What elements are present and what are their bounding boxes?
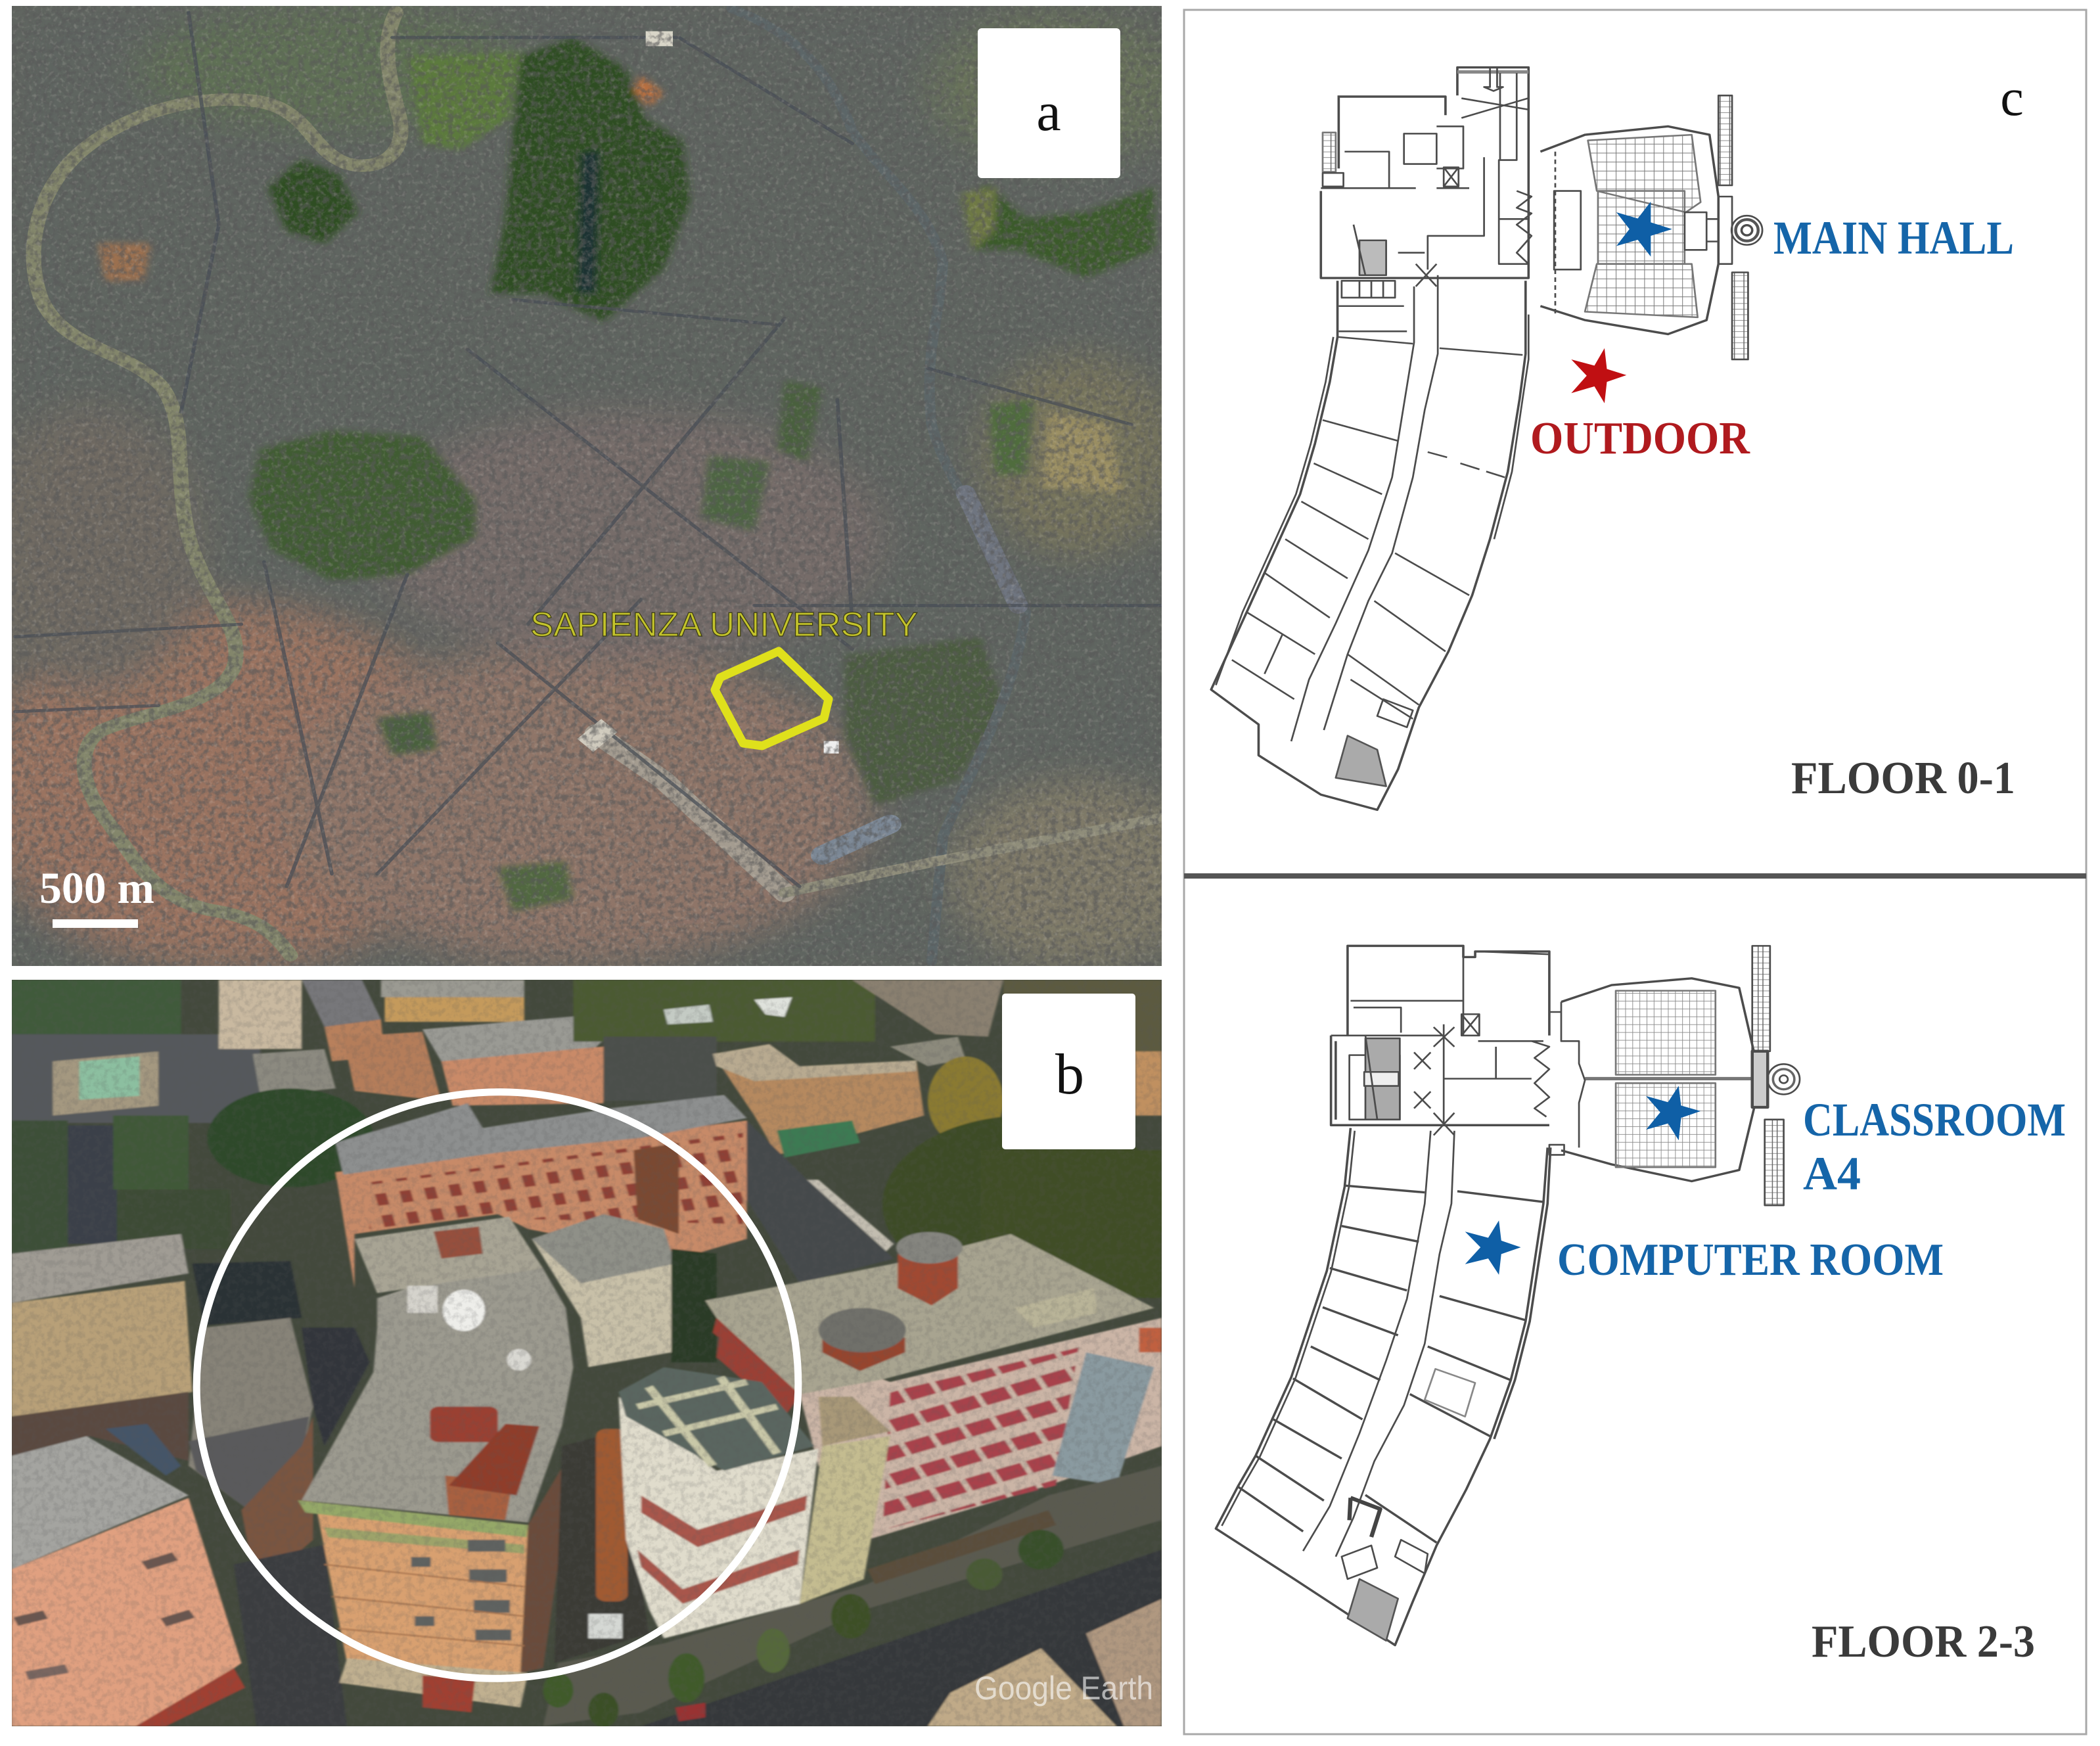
star: outdoor [1571, 348, 1626, 403]
main hall outline and seating [1540, 95, 1762, 359]
star: computer room [1465, 1220, 1521, 1275]
label: floor 2-3: FLOOR 2-3 [1812, 1617, 2035, 1667]
label: outdoor: OUTDOOR [1530, 413, 1750, 464]
surroundings top left [11, 980, 607, 1254]
top block: entrance and stairs [1331, 946, 1564, 1155]
wing: outer walls, corridor and rooms [1211, 275, 1528, 810]
dark gap and orange cylindrical stairs [555, 1429, 649, 1663]
watermark: Google Earth: Google Earth [974, 1670, 1153, 1707]
central curved roof building [298, 1217, 573, 1712]
label: classroom A4: CLASSROOM [1803, 1093, 2066, 1146]
yellow outline: Sapienza University campus [715, 651, 829, 746]
panel a: satellite map of Rome [0, 5, 1207, 968]
floor plan: floor 0-1 [1211, 68, 1762, 810]
left small building and road [189, 1261, 370, 1726]
front white building [618, 1367, 890, 1638]
label box: b: b [1055, 1043, 1084, 1107]
map label: Sapienza University: SAPIENZA UNIVERSITY [530, 606, 918, 644]
left-side buildings [11, 1234, 245, 1726]
panel c: floor plans frame [1184, 10, 2086, 1734]
surroundings top right [573, 980, 1169, 1298]
floor plan: floor 2-3 [1216, 946, 1800, 1645]
label box: a [978, 28, 1120, 178]
star: main hall [1616, 202, 1672, 257]
label box: b [1002, 994, 1135, 1149]
panel b: aerial view of the buildings [11, 980, 1169, 1727]
top block: entrance and stairs [1321, 68, 1532, 298]
label: computer room: COMPUTER ROOM [1557, 1235, 1944, 1285]
label: classroom A4: A4 [1803, 1147, 1861, 1200]
label: floor 0-1: FLOOR 0-1 [1791, 753, 2015, 804]
label: main hall: MAIN HALL [1773, 212, 2014, 264]
label box: a: a [1036, 81, 1061, 143]
pale striped building [532, 1214, 717, 1367]
star: classroom A4 [1646, 1086, 1701, 1140]
right red striped building [705, 1232, 1162, 1540]
scale bar: 500 m: 500 m [39, 863, 154, 913]
white ellipse marking the studied building [158, 1053, 836, 1717]
central orange building [336, 1095, 747, 1288]
classroom A4 outline and seating [1549, 946, 1800, 1205]
marker: main hall blue star [1638, 218, 1651, 236]
panel letter: c: c [2000, 69, 2024, 127]
street and front trees [543, 1466, 1162, 1727]
wing: outer walls, corridor and rooms [1216, 1128, 1551, 1645]
